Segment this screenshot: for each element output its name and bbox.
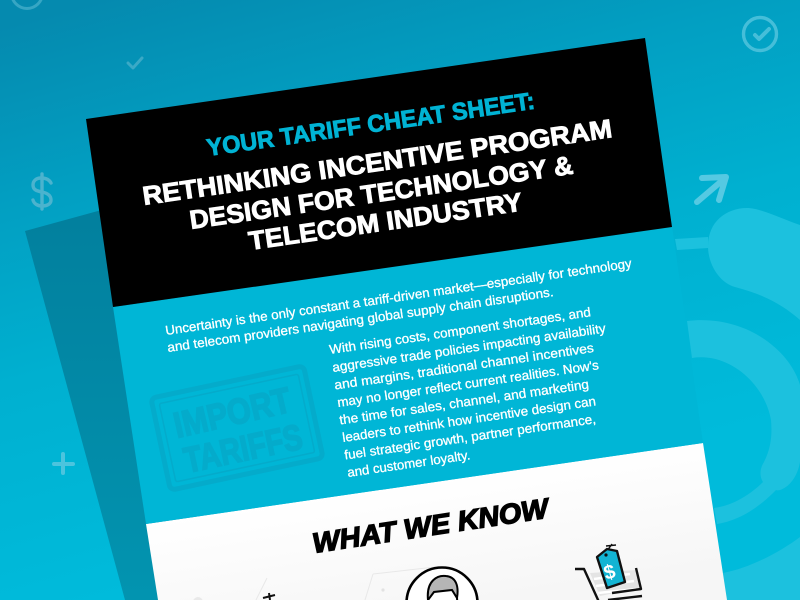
decorative shape: large right-side emblem [675, 208, 800, 600]
title [141, 113, 614, 256]
icon: partial circle top left [12, 0, 42, 8]
title: TELECOM INDUSTRY [247, 187, 524, 256]
text block: paragraph: leaders to rethink how incentive design can [341, 393, 597, 445]
title: RETHINKING INCENTIVE PROGRAM [141, 113, 614, 211]
icon: arrow [697, 177, 726, 202]
title: DESIGN FOR TECHNOLOGY & [188, 150, 575, 235]
text block: paragraph: fuel strategic growth, partner performance, [343, 411, 597, 462]
text block: paragraph: may no longer reflect current realities. Now's [336, 357, 600, 410]
icon: shopping cart with price tag: $ [601, 561, 618, 585]
text block: lead: and telecom providers navigating global supply chain disruptions. [166, 284, 554, 355]
text block: paragraph: With rising costs, component shortages, and [328, 304, 592, 357]
stamp: import tariffs [151, 366, 323, 490]
stamp: import tariffs: TARIFFS [180, 416, 306, 481]
panel: white section [146, 443, 727, 600]
text block: paragraph [328, 304, 607, 480]
icon: dollar sign [33, 174, 51, 209]
faint illustration lines [193, 567, 435, 600]
icon: shopping cart with price tag [575, 544, 642, 600]
icon: plus [54, 454, 73, 473]
text block: paragraph: and customer loyalty. [346, 447, 471, 480]
text block: paragraph: and margins, traditional channel incentives [333, 340, 595, 392]
panel: blue intro section [113, 226, 703, 524]
text block: paragraph: aggressive trade policies impacting availability [331, 320, 607, 375]
text block: lead: Uncertainty is the only constant a tariff-driven market—especially for technology [164, 255, 633, 338]
text block: paragraph: the time for sales, channel, and marketing [338, 376, 590, 427]
shadow sheet [25, 183, 200, 600]
icon: small sparkle [263, 593, 275, 600]
icon: check circle top right [744, 18, 776, 50]
stamp: import tariffs: IMPORT [170, 379, 295, 446]
icon: small check [128, 58, 142, 68]
panel: black title block [86, 38, 672, 307]
heading: what we know: WHAT WE KNOW [310, 492, 553, 559]
subtitle: YOUR TARIFF CHEAT SHEET: [205, 88, 536, 162]
icon: person [406, 568, 478, 600]
